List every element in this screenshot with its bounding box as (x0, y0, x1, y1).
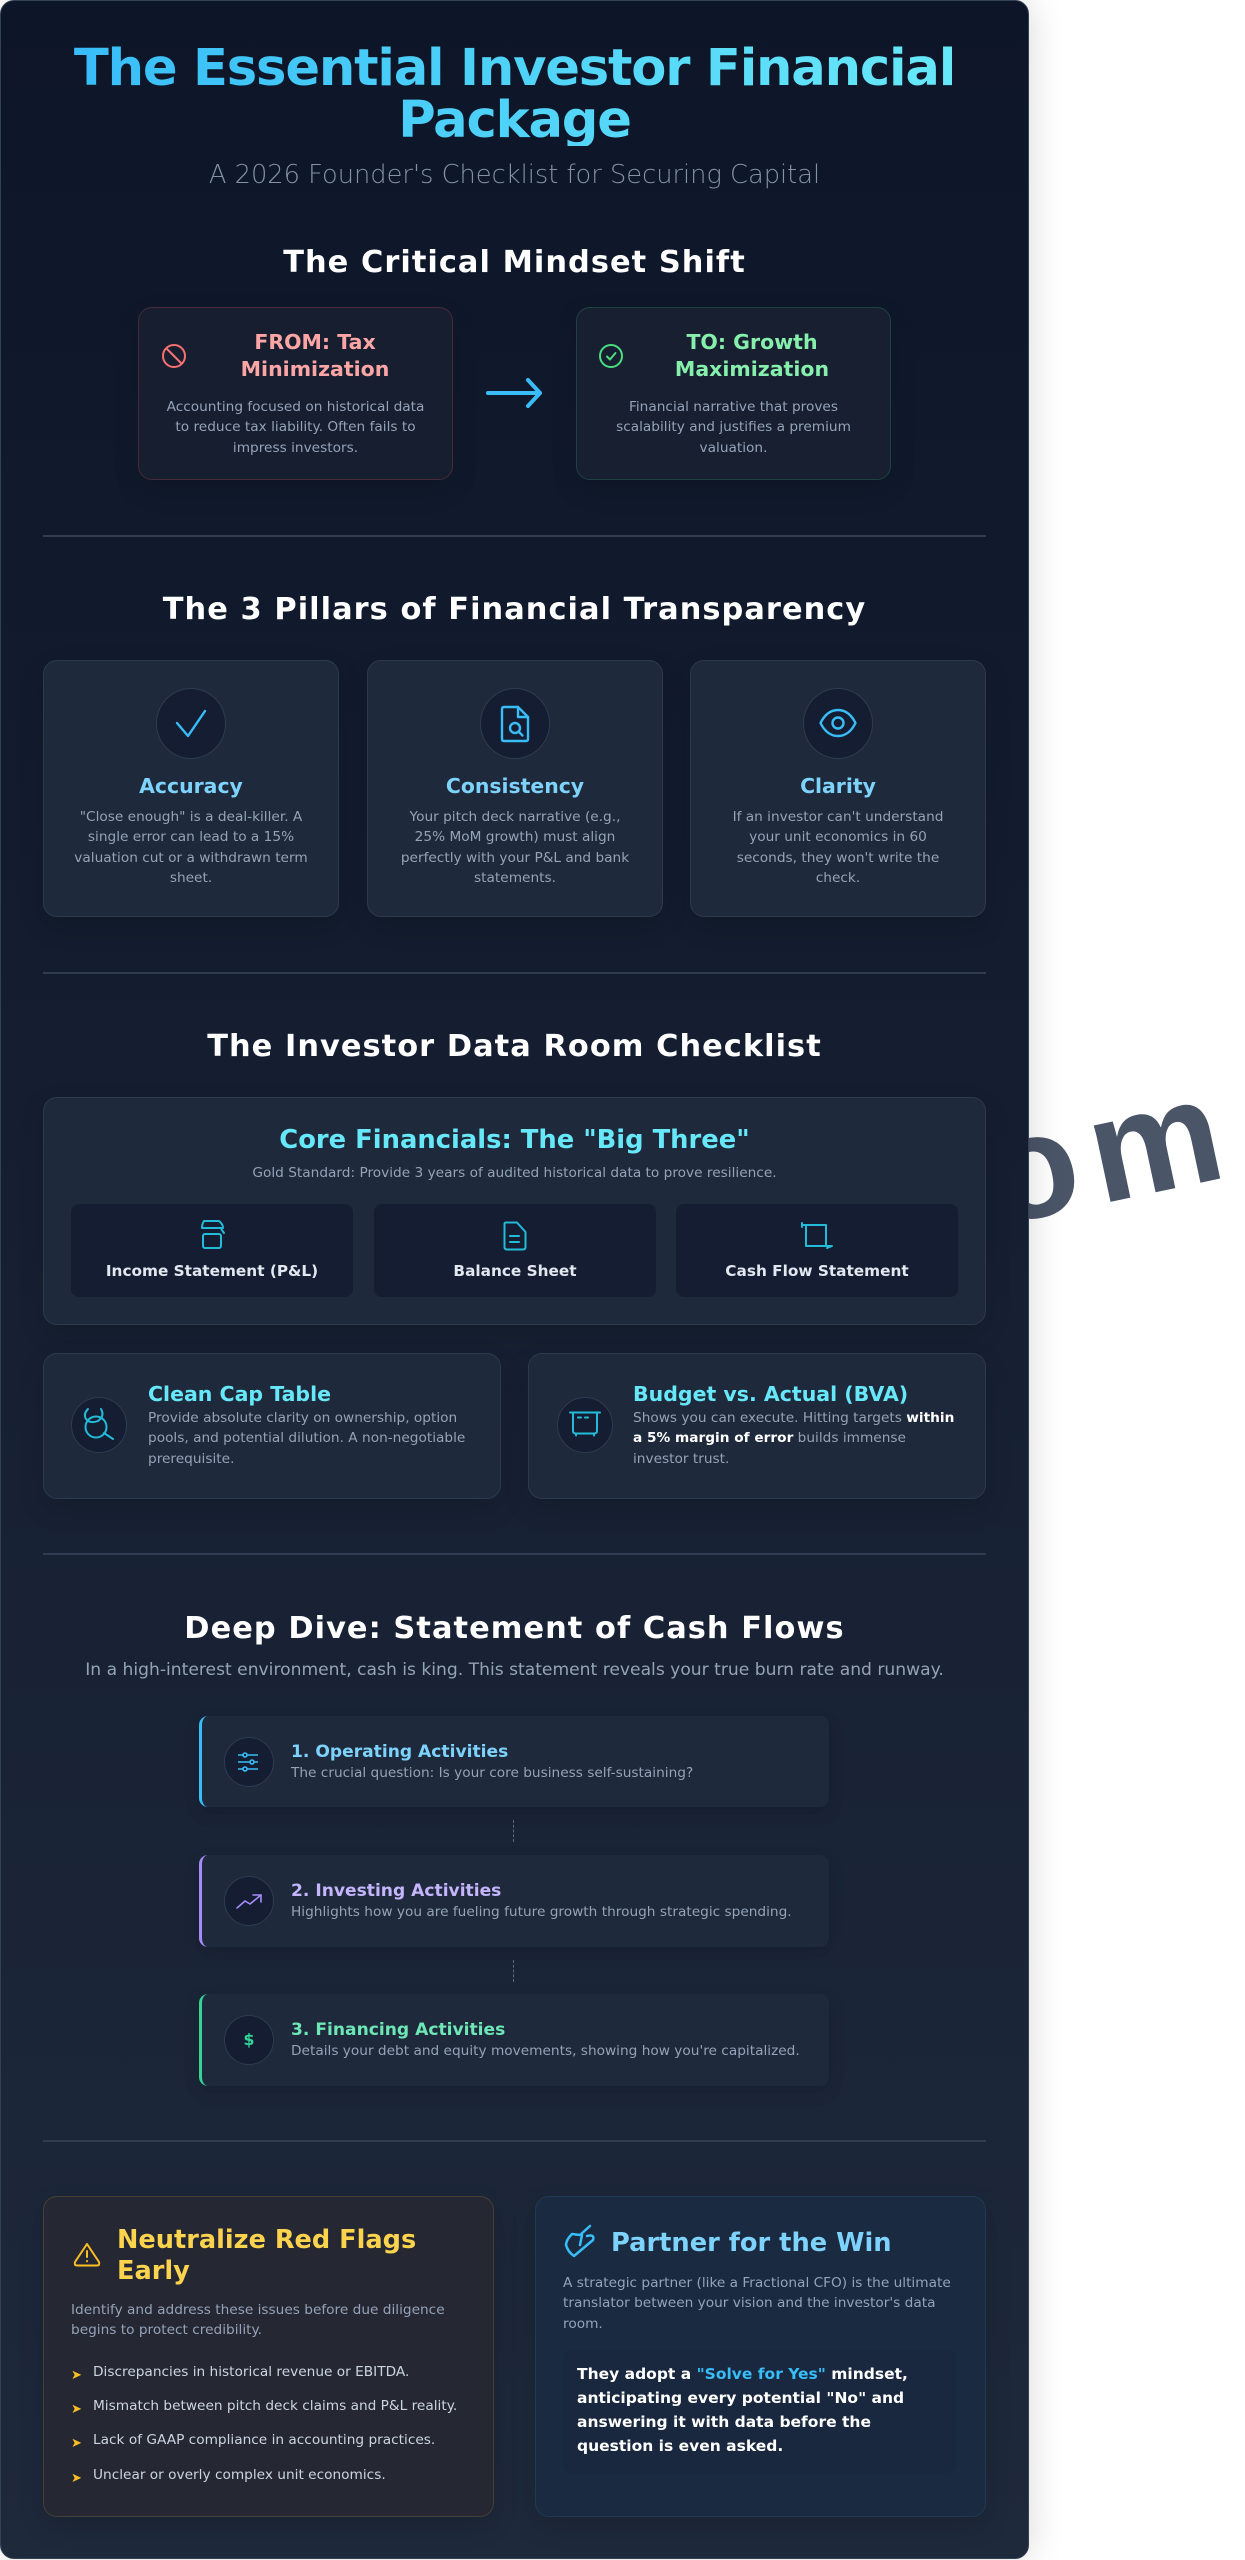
watermark: om (971, 1044, 1245, 1257)
to text (616, 399, 851, 456)
accuracy name: Accuracy (139, 774, 243, 798)
financing text: Details your debt and equity movements, showing how you're capitalized. (291, 2043, 800, 2059)
icon: clarity circle (803, 688, 873, 759)
arrow (486, 378, 542, 408)
red flag text 4: Unclear or overly complex unit economics. (93, 2467, 386, 2483)
investing heading: 2. Investing Activities (291, 1881, 501, 1901)
red flags heading: Early (117, 2256, 190, 2286)
icon: cap table (84, 1408, 114, 1440)
icon circle: financing (224, 2015, 274, 2065)
panel: to growth maximization (576, 307, 891, 480)
red flags text: Identify and address these issues before due diligence (71, 2302, 445, 2318)
accuracy text: single error can lead to a 15% (88, 829, 294, 845)
red flag text 2: Mismatch between pitch deck claims and P&L reality. (93, 2398, 457, 2414)
panel: from tax minimization (138, 307, 453, 480)
icon circle: operating (224, 1737, 274, 1787)
consistency text: perfectly with your P&L and bank (401, 850, 629, 866)
from text (166, 399, 424, 456)
icon: bva (569, 1412, 601, 1436)
heading: pillars: The 3 Pillars of Financial Transparency (163, 592, 866, 626)
panel: operating activities (199, 1716, 829, 1807)
panel: consistency (367, 660, 663, 917)
label: cash flow: Cash Flow Statement (725, 1262, 909, 1280)
cap table text: pools, and potential dilution. A non-negotiable (148, 1430, 465, 1446)
red flag item 3: ➤ (71, 2436, 82, 2451)
item: cash flow statement (676, 1204, 958, 1297)
partner callout (563, 2350, 956, 2473)
icon: document search (500, 706, 530, 742)
consistency name: Consistency (446, 774, 584, 798)
callout text: question is even asked. (577, 2437, 783, 2455)
bva text: a 5% margin of error builds immense (633, 1430, 906, 1446)
panel: financing activities (199, 1994, 829, 2086)
to heading: TO: Growth (686, 330, 818, 354)
callout text: answering it with data before the (577, 2413, 871, 2431)
financing heading: 3. Financing Activities (291, 2020, 505, 2040)
from text: Accounting focused on historical data (167, 399, 424, 415)
item: balance sheet (374, 1204, 656, 1297)
from text: to reduce tax liability. Often fails to (175, 419, 416, 435)
to heading: Maximization (675, 356, 829, 380)
bva heading: Budget vs. Actual (BVA) (633, 1382, 908, 1406)
cap table text (148, 1410, 465, 1467)
consistency text (401, 809, 629, 886)
icon: balance sheet (504, 1222, 526, 1250)
to text: Financial narrative that proves (629, 399, 838, 415)
panel: partner (535, 2196, 986, 2517)
to heading (675, 330, 829, 380)
red flag text 3: Lack of GAAP compliance in accounting practices. (93, 2432, 435, 2448)
partner text: translator between your vision and the investor's data (563, 2295, 936, 2311)
icon: accuracy circle (156, 688, 226, 759)
red flags text: begins to protect credibility. (71, 2322, 262, 2338)
red flag item 4: ➤ (71, 2471, 82, 2486)
core text: Gold Standard: Provide 3 years of audited historical data to prove resilience. (252, 1165, 777, 1181)
icon: trend up (236, 1894, 262, 1909)
clarity name: Clarity (800, 774, 876, 798)
accuracy text (74, 809, 308, 886)
icon circle: cap table (71, 1397, 127, 1453)
icon: check (176, 710, 206, 738)
icon: handshake (564, 2224, 595, 2258)
from heading (241, 330, 389, 380)
red flags text (71, 2302, 445, 2338)
item: income statement (71, 1204, 353, 1297)
core heading: Core Financials: The "Big Three" (279, 1125, 750, 1155)
consistency text: 25% MoM growth) must align (415, 829, 615, 845)
panel: investing activities (199, 1855, 829, 1947)
partner text (563, 2275, 951, 2332)
panel: red flags (43, 2196, 494, 2517)
red flag item 2: ➤ (71, 2402, 82, 2417)
to text: scalability and justifies a premium (616, 419, 851, 435)
bva text: investor trust. (633, 1451, 729, 1467)
operating heading: 1. Operating Activities (291, 1742, 508, 1762)
partner text: A strategic partner (like a Fractional CFO) is the ultimate (563, 2275, 951, 2291)
red flag item 1: ➤ (71, 2368, 82, 2383)
clarity text: check. (816, 870, 860, 886)
label: balance sheet: Balance Sheet (453, 1262, 577, 1280)
operating text: The crucial question: Is your core business self-sustaining? (291, 1765, 693, 1781)
consistency text: Your pitch deck narrative (e.g., (410, 809, 620, 825)
icon: consistency circle (480, 688, 550, 759)
icon: sliders (238, 1752, 258, 1772)
consistency text: statements. (474, 870, 556, 886)
clarity text: seconds, they won't write the (737, 850, 939, 866)
cap table text: prerequisite. (148, 1451, 234, 1467)
heading: mindset shift: The Critical Mindset Shift (283, 244, 746, 280)
bva text (633, 1410, 954, 1467)
investing text: Highlights how you are fueling future growth through strategic spending. (291, 1904, 792, 1920)
clarity text (733, 809, 943, 886)
red flags heading (117, 2225, 416, 2286)
heading: data room: The Investor Data Room Checklist (207, 1028, 822, 1064)
title (0, 42, 1029, 146)
from heading: FROM: Tax (254, 330, 376, 354)
callout text: They adopt a "Solve for Yes" mindset, (577, 2365, 908, 2383)
callout text: anticipating every potential "No" and (577, 2389, 904, 2407)
accuracy text: "Close enough" is a deal-killer. A (80, 809, 302, 825)
partner heading: Partner for the Win (611, 2228, 892, 2258)
heading: cash flows: Deep Dive: Statement of Cash Flows (184, 1610, 845, 1646)
cap table text: Provide absolute clarity on ownership, option (148, 1410, 457, 1426)
cash flow intro: In a high-interest environment, cash is king. This statement reveals your true burn rate and runway. (85, 1660, 944, 1680)
accuracy text: valuation cut or a withdrawn term (74, 850, 308, 866)
bva text: Shows you can execute. Hitting targets within (633, 1410, 954, 1426)
panel: accuracy (43, 660, 339, 917)
callout text (577, 2365, 908, 2455)
partner text: room. (563, 2316, 603, 2332)
icon: warning (74, 2243, 100, 2266)
from heading: Minimization (241, 356, 389, 380)
icon: income statement (201, 1220, 225, 1249)
label: income statement: Income Statement (P&L) (106, 1262, 318, 1280)
clarity text: If an investor can't understand (733, 809, 943, 825)
subtitle: A 2026 Founder's Checklist for Securing Capital (209, 160, 820, 190)
accuracy text: sheet. (170, 870, 212, 886)
panel: core financials (43, 1097, 986, 1325)
icon: cash flow (801, 1222, 833, 1249)
red flags heading: Neutralize Red Flags (117, 2225, 416, 2255)
panel: clean cap table (43, 1353, 501, 1499)
icon: ban (162, 344, 186, 368)
clarity text: your unit economics in 60 (749, 829, 927, 845)
icon: dollar: $ (243, 2030, 255, 2049)
icon: eye (819, 708, 857, 738)
to text: valuation. (700, 440, 767, 456)
icon circle: bva (557, 1397, 613, 1453)
icon: check circle (599, 344, 623, 368)
icon circle: investing (224, 1876, 274, 1926)
title: Package (398, 90, 631, 150)
panel: budget vs actual (528, 1353, 986, 1499)
panel: clarity (690, 660, 986, 917)
red flag text 1: Discrepancies in historical revenue or EBITDA. (93, 2364, 409, 2380)
cap table heading: Clean Cap Table (148, 1382, 331, 1406)
from text: impress investors. (233, 440, 358, 456)
title: The Essential Investor Financial (74, 38, 955, 98)
